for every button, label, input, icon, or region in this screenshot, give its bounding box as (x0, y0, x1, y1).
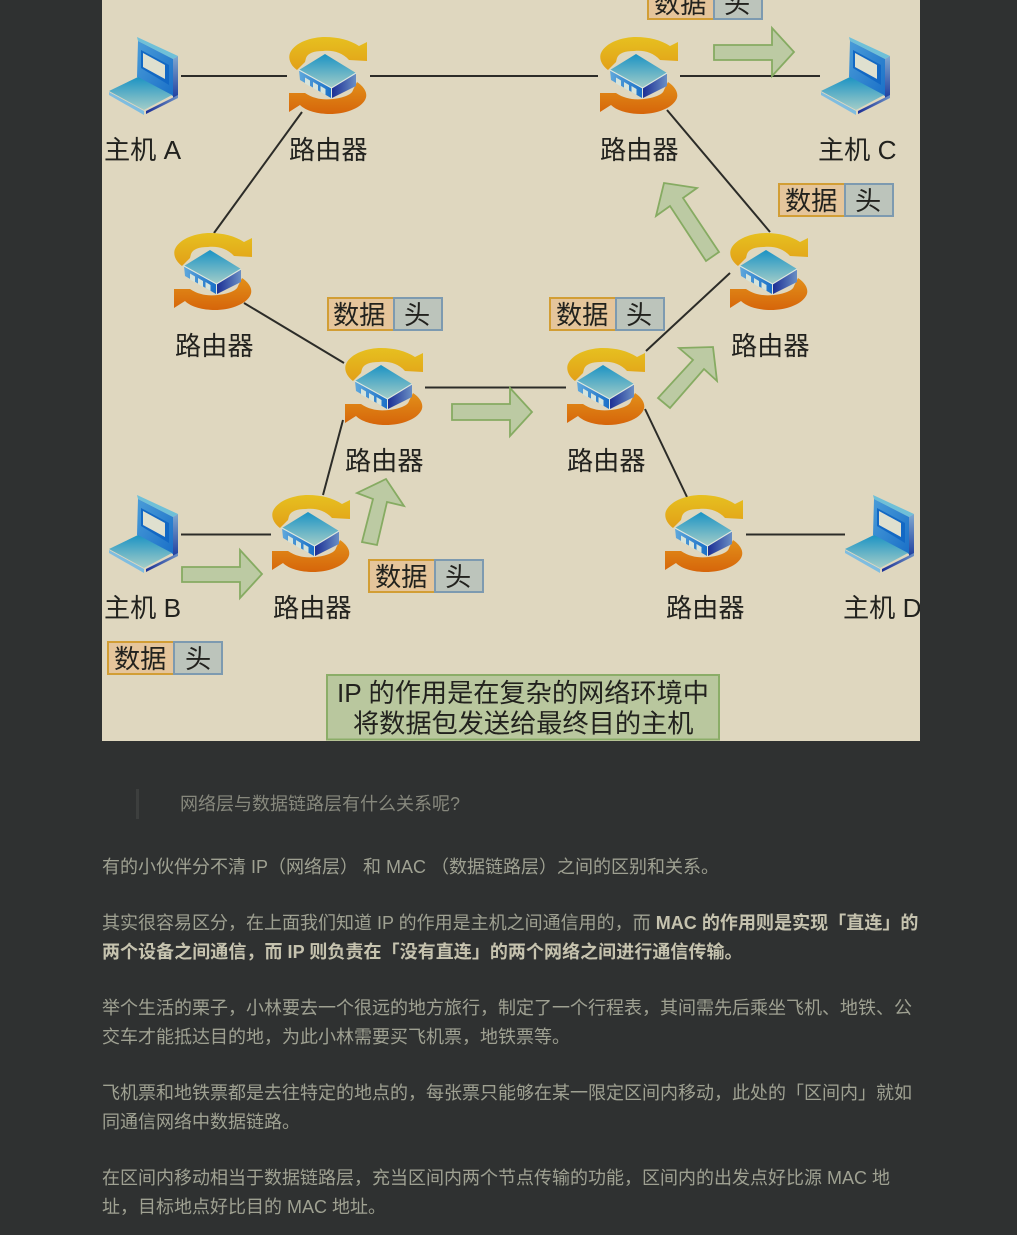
packet: right router (779, 184, 893, 216)
router: top left: 路由器 (289, 135, 368, 165)
paragraph: data link analogy (102, 1168, 890, 1217)
router: bottom right: 路由器 (666, 593, 745, 623)
paragraph: tickets (102, 1083, 912, 1132)
paragraph: travel example: 举个生活的栗子，小林要去一个很远的地方旅行，制定了一个行程表，其间需先后乘坐飞机、地铁、公 (102, 998, 912, 1018)
packet: middle left router: 数据 (333, 300, 385, 330)
network diagram image (102, 0, 920, 741)
packet: middle right router (550, 298, 664, 330)
router: bottom left: 路由器 (273, 593, 352, 623)
paragraph: tickets: 飞机票和地铁票都是去往特定的地点的，每张票只能够在某一限定区间内移动，此处的「区间内」就如 (102, 1083, 912, 1103)
router: right: 路由器 (731, 331, 810, 361)
paragraph: travel example: 交车才能抵达目的地，为此小林需要买飞机票，地铁票等。 (102, 1027, 570, 1047)
host D (843, 495, 922, 623)
packet: right router: 头 (855, 186, 881, 216)
network links (181, 76, 845, 534)
router: left (174, 233, 254, 361)
packet: bottom router: 头 (445, 562, 471, 592)
router: right (730, 233, 810, 361)
blockquote bar (136, 789, 139, 819)
packet: bottom router: 数据 (375, 562, 427, 592)
router: bottom left (272, 495, 352, 623)
router: middle right (567, 348, 646, 476)
router: middle right: 路由器 (567, 446, 646, 476)
paragraph: data link analogy: 在区间内移动相当于数据链路层，充当区间内两个节点传输的功能，区间内的出发点好比源 MAC 地 (102, 1168, 890, 1188)
packet: middle left router (328, 298, 442, 330)
packet: top right router (648, 0, 762, 19)
paragraph: difference (102, 913, 918, 962)
paragraph: tickets: 同通信网络中数据链路。 (102, 1112, 300, 1132)
caption box: 将数据包发送给最终目的主机 (353, 708, 693, 738)
host D: 主机 D (843, 593, 920, 623)
packet: middle right router: 数据 (556, 300, 608, 330)
packet: middle left router: 头 (404, 300, 430, 330)
packet: near host B (108, 642, 222, 674)
caption box: IP 的作用是在复杂的网络环境中 (337, 678, 709, 708)
blockquote text: 网络层与数据链路层有什么关系呢? (180, 794, 460, 814)
paragraph: travel example (102, 998, 912, 1047)
paragraph: difference: 其实很容易区分，在上面我们知道 IP 的作用是主机之间通信用的，而 MAC 的作用则是实现「直连」的 (102, 913, 918, 933)
packet: right router: 数据 (785, 186, 837, 216)
router: middle left (345, 348, 424, 476)
packet: bottom router (369, 560, 483, 592)
paragraph: difference: 两个设备之间通信，而 IP 则负责在「没有直连」的两个网络之间进行通信传输。 (102, 942, 743, 962)
host A (104, 37, 182, 165)
host C (818, 37, 897, 165)
host C: 主机 C (818, 135, 897, 165)
router: left: 路由器 (175, 331, 254, 361)
paragraph: IP and MAC confusion: 有的小伙伴分不清 IP（网络层） 和 MAC （数据链路层）之间的区别和关系。 (102, 857, 719, 877)
paragraph: data link analogy: 址，目标地点好比目的 MAC 地址。 (102, 1197, 386, 1217)
host B: 主机 B (104, 593, 181, 623)
flow arrows (182, 28, 794, 598)
router: top right: 路由器 (600, 135, 679, 165)
host B (104, 495, 181, 623)
packet: near host B: 数据 (114, 644, 166, 674)
router: top right (600, 37, 679, 165)
packet: near host B: 头 (185, 644, 211, 674)
router: top left (289, 37, 368, 165)
caption box (327, 675, 719, 740)
router: middle left: 路由器 (345, 446, 424, 476)
router: bottom right (665, 495, 745, 623)
packet: middle right router: 头 (626, 300, 652, 330)
host A: 主机 A (104, 135, 182, 165)
